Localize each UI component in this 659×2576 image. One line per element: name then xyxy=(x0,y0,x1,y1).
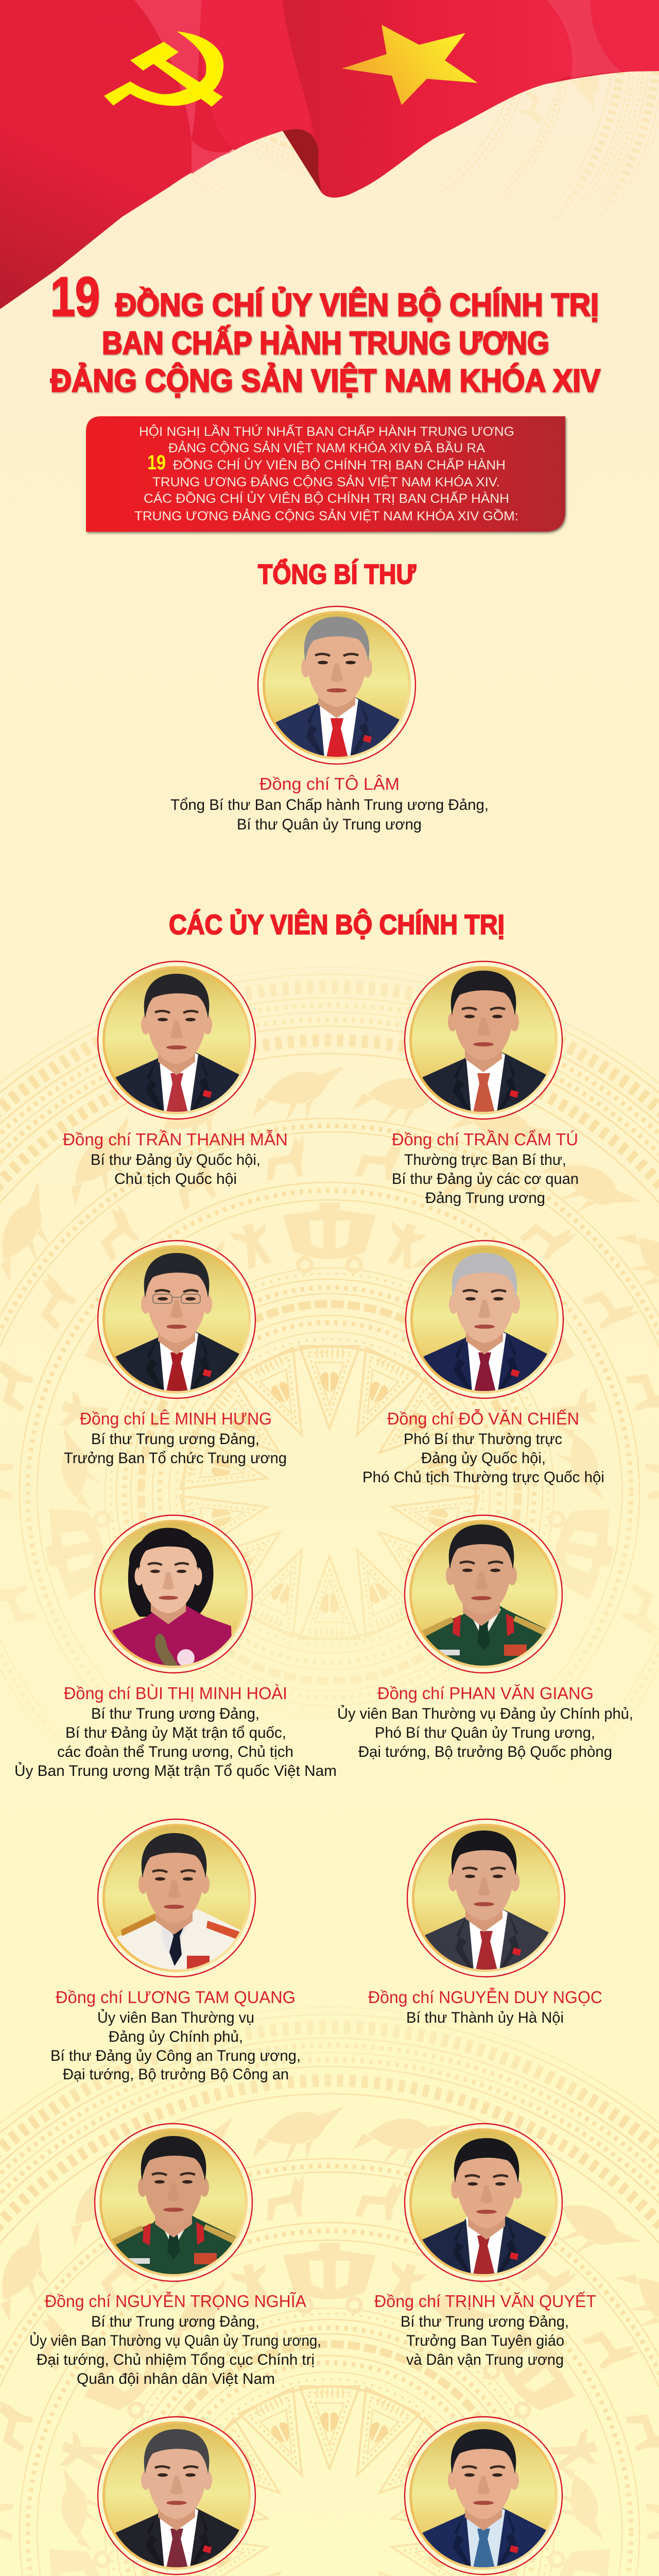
portrait: Luong Tam Quang xyxy=(98,1819,255,1977)
role: các đoàn thể Trung ương, Chủ tịch xyxy=(57,1743,293,1760)
role xyxy=(337,1705,633,1760)
role: Bí thư Trung ương Đảng, xyxy=(91,1431,259,1448)
drum pattern lower background xyxy=(0,2007,659,2576)
name: Đồng chí TRẦN THANH MẪN xyxy=(63,1130,288,1149)
role: Trưởng Ban Tuyên giáo xyxy=(406,2332,564,2349)
role: Phó Bí thư Quân ủy Trung ương, xyxy=(375,1724,595,1741)
card: Do Van Chien xyxy=(362,1241,604,1486)
icon: hammer and sickle xyxy=(104,31,223,107)
portrait: Bui Thi Minh Hoai xyxy=(95,1515,252,1673)
role: Bí thư Thành ủy Hà Nội xyxy=(406,2009,564,2026)
portrait: Le Minh Tri xyxy=(405,2417,562,2574)
title xyxy=(50,265,600,399)
drum pattern upper background xyxy=(0,967,659,1718)
card: Phan Van Giang xyxy=(337,1515,633,1760)
portrait: Tran Cam Tu xyxy=(405,961,562,1119)
role xyxy=(362,1431,604,1486)
card: Le Minh Hung xyxy=(64,1241,287,1467)
role: Đại tướng, Bộ trưởng Bộ Quốc phòng xyxy=(358,1743,612,1760)
title: 19 xyxy=(50,265,100,328)
title: BAN CHẤP HÀNH TRUNG ƯƠNG xyxy=(102,326,549,361)
title: ĐẢNG CỘNG SẢN VIỆT NAM KHÓA XIV xyxy=(50,363,600,399)
name: Đồng chí NGUYỄN TRỌNG NGHĨA xyxy=(45,2292,306,2311)
name: Đồng chí TRẦN CẨM TÚ xyxy=(392,1130,578,1149)
role: Chủ tịch Quốc hội xyxy=(114,1171,237,1188)
role: Bí thư Đảng ủy các cơ quan xyxy=(392,1171,579,1188)
role xyxy=(29,2313,321,2387)
role: Quân đội nhân dân Việt Nam xyxy=(77,2370,275,2387)
role: Phó Chủ tịch Thường trực Quốc hội xyxy=(362,1469,604,1486)
portrait: To Lam xyxy=(258,606,415,764)
card: Bui Thi Minh Hoai xyxy=(14,1515,337,1780)
name: Đồng chí LÊ MINH HƯNG xyxy=(80,1409,272,1428)
role: Đảng ủy Quốc hội, xyxy=(421,1450,546,1467)
role xyxy=(401,2313,569,2368)
drum pattern under flag xyxy=(152,71,659,208)
role xyxy=(392,1151,579,1207)
role xyxy=(64,1431,287,1467)
role: Trưởng Ban Tổ chức Trung ương xyxy=(64,1450,287,1467)
card: Tran Thanh Man xyxy=(63,961,288,1188)
portrait: Le Hoai Trung xyxy=(98,2417,255,2574)
role: Bí thư Trung ương Đảng, xyxy=(401,2313,569,2330)
card: Le Hoai Trung xyxy=(27,2417,324,2576)
role: Đảng Trung ương xyxy=(425,1190,545,1207)
role: Phó Bí thư Thường trực xyxy=(404,1431,562,1448)
role: Đảng ủy Chính phủ, xyxy=(109,2028,243,2045)
intro callout panel: TRUNG ƯƠNG ĐẢNG CỘNG SẢN VIỆT NAM KHÓA XIV. xyxy=(152,474,500,489)
card: To Lam xyxy=(170,606,489,833)
intro callout panel: CÁC ĐỒNG CHÍ ỦY VIÊN BỘ CHÍNH TRỊ BAN CHẤP HÀNH xyxy=(144,490,509,506)
role: Ủy viên Ban Thường vụ xyxy=(97,2009,254,2026)
intro callout panel: ĐỒNG CHÍ ỦY VIÊN BỘ CHÍNH TRỊ BAN CHẤP HÀNH xyxy=(173,457,506,472)
role xyxy=(50,2009,301,2083)
name: Đồng chí LƯƠNG TAM QUANG xyxy=(56,1988,296,2007)
role: Ủy Ban Trung ương Mặt trận Tổ quốc Việt Nam xyxy=(14,1762,337,1780)
role: Bí thư Quân ủy Trung ương xyxy=(237,816,422,833)
role xyxy=(170,796,489,833)
portrait: Tran Thanh Man xyxy=(98,961,255,1119)
portrait: Le Minh Hung xyxy=(98,1241,255,1398)
intro callout panel: TRUNG ƯƠNG ĐẢNG CỘNG SẢN VIỆT NAM KHÓA XIV GỒM: xyxy=(134,508,518,523)
heading: politburo members: CÁC ỦY VIÊN BỘ CHÍNH TRỊ xyxy=(169,909,505,940)
flag banner xyxy=(0,0,659,309)
intro callout panel: HỘI NGHỊ LẦN THỨ NHẤT BAN CHẤP HÀNH TRUNG ƯƠNG xyxy=(139,424,514,439)
icon: yellow star xyxy=(342,25,478,105)
role: Thường trực Ban Bí thư, xyxy=(404,1151,566,1168)
portrait: Nguyen Trong Nghia xyxy=(95,2124,252,2281)
intro callout panel xyxy=(86,416,565,532)
heading: general secretary: TỔNG BÍ THƯ xyxy=(258,559,416,590)
role: Đại tướng, Bộ trưởng Bộ Công an xyxy=(63,2066,289,2083)
role: Bí thư Đảng ủy Mặt trận tổ quốc, xyxy=(65,1724,286,1741)
name: Đồng chí PHAN VĂN GIANG xyxy=(377,1684,594,1703)
role xyxy=(14,1705,337,1780)
intro callout panel: ĐẢNG CỘNG SẢN VIỆT NAM KHÓA XIV ĐÃ BẦU RA xyxy=(168,440,485,455)
role: Đại tướng, Chủ nhiệm Tổng cục Chính trị xyxy=(37,2351,315,2368)
role: Tổng Bí thư Ban Chấp hành Trung ương Đảng, xyxy=(170,796,489,814)
name: Đồng chí TÔ LÂM xyxy=(259,774,400,793)
name: Đồng chí NGUYỄN DUY NGỌC xyxy=(368,1988,602,2007)
role: Bí thư Trung ương Đảng, xyxy=(91,2313,259,2330)
portrait: Phan Van Giang xyxy=(405,1515,562,1673)
title: ĐỒNG CHÍ ỦY VIÊN BỘ CHÍNH TRỊ xyxy=(115,287,599,323)
card: Le Minh Tri xyxy=(386,2417,585,2576)
role: và Dân vận Trung ương xyxy=(406,2351,564,2368)
role: Ủy viên Ban Thường vụ Đảng ủy Chính phủ, xyxy=(337,1705,633,1722)
card: Tran Cam Tu xyxy=(392,961,579,1207)
name: Đồng chí ĐỖ VĂN CHIẾN xyxy=(387,1409,579,1428)
name: Đồng chí TRỊNH VĂN QUYẾT xyxy=(374,2292,596,2311)
portrait: Nguyen Duy Ngoc xyxy=(407,1819,565,1977)
intro callout panel: 19 xyxy=(147,451,166,474)
card: Luong Tam Quang xyxy=(50,1819,301,2083)
role xyxy=(91,1151,261,1188)
card: Trinh Van Quyet xyxy=(374,2124,596,2368)
portrait: Do Van Chien xyxy=(406,1241,563,1398)
card: Nguyen Trong Nghia xyxy=(29,2124,321,2387)
portrait: Trinh Van Quyet xyxy=(405,2124,562,2281)
role: Bí thư Đảng ủy Quốc hội, xyxy=(91,1151,261,1168)
role: Bí thư Trung ương Đảng, xyxy=(91,1705,259,1722)
role: Bí thư Đảng ủy Công an Trung ương, xyxy=(50,2047,301,2064)
card: Nguyen Duy Ngoc xyxy=(368,1819,602,2026)
name: Đồng chí BÙI THỊ MINH HOÀI xyxy=(64,1684,287,1703)
role: Ủy viên Ban Thường vụ Quân ủy Trung ương, xyxy=(29,2332,321,2349)
